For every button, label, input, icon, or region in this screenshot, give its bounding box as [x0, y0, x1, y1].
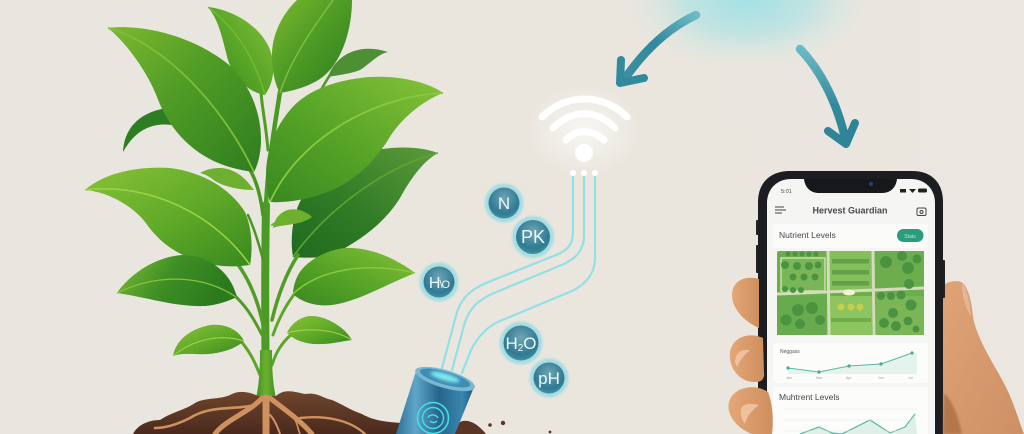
chart card: top: [773, 343, 928, 383]
chart card: bottom: Muhtrent Levels: [779, 392, 839, 402]
soil mound: [133, 391, 551, 434]
chart card: top: Jun: [878, 376, 884, 380]
leaf: big top left: [108, 27, 261, 172]
chart card: top: Mar: [816, 376, 823, 380]
sensor ring icon: [418, 402, 448, 434]
nutrient bubble: N: N: [498, 194, 510, 213]
nutrient bubble: pH: pH: [538, 369, 560, 388]
leaf: left middle: [117, 255, 237, 306]
data wires: [442, 173, 595, 373]
main stem base: [256, 350, 276, 398]
arrow: cloud to phone: [800, 49, 855, 144]
leaf: right middle: [293, 248, 415, 305]
nutrient bubble: N: [484, 184, 524, 222]
leaf: big right: [266, 77, 443, 202]
chart card: top: Neggass: [780, 349, 800, 355]
leaf: top centre left: [208, 7, 273, 95]
status bar: 5:01: [781, 189, 792, 195]
nutrient bubble: H2O: O: [523, 334, 537, 353]
cloud glow: [613, 0, 883, 74]
chart card: bottom: [773, 387, 928, 434]
side buttons: [756, 220, 945, 298]
nutrient bubble: pH: [530, 358, 568, 398]
thumbnail shading: [962, 283, 971, 316]
menu icon: [775, 207, 786, 213]
plant: [85, 0, 443, 398]
leaf: lower right: [287, 316, 352, 344]
leaf: centre small: [273, 209, 312, 228]
back leaf: dark curl: [123, 108, 172, 152]
back leaf: small top right: [320, 49, 388, 92]
soil sensor: [396, 362, 477, 434]
field map: [777, 251, 924, 335]
roots: [155, 398, 365, 434]
status pill: [897, 229, 924, 242]
leaf: lower left: [173, 325, 244, 356]
app title: Hervest Guardian: [812, 206, 888, 216]
leaf: top centre: [272, 0, 352, 93]
nutrient bubble: PK: PK: [521, 227, 545, 247]
wire nodes: [570, 170, 598, 176]
finger 2: [730, 335, 764, 382]
stems: [232, 92, 298, 392]
section heading: [773, 224, 928, 248]
finger 3: [728, 387, 773, 434]
status bar: [781, 188, 927, 195]
nutrient bubble: PK: [512, 216, 554, 258]
nutrient bubble: H10: [420, 262, 458, 302]
nutrient bubble: H2O: H: [505, 334, 518, 353]
back leaf: dark right: [292, 147, 438, 258]
chart card: top: Jan: [786, 376, 792, 380]
leaf: small middle back: [200, 168, 254, 190]
notch: [804, 179, 897, 193]
chart card: top: Jul: [908, 376, 913, 380]
status pill: Stats: [904, 234, 916, 240]
chart card: top: Apr: [846, 376, 852, 380]
soil crumbs: [488, 421, 551, 433]
leaf: big left: [85, 168, 252, 266]
hand behind phone: [935, 281, 1024, 434]
nutrient bubble: H10: H\O: [429, 275, 451, 292]
section heading: Nutrient Levels: [779, 230, 836, 240]
wifi icon: [526, 84, 642, 176]
nutrient bubble: H2O: 2: [518, 343, 524, 354]
wrist shadow: [943, 393, 962, 434]
nutrient bubble: H2O: [500, 322, 542, 364]
finger 1: [732, 278, 759, 328]
camera icon: [917, 208, 926, 216]
arrow: cloud to wifi: [620, 15, 696, 83]
leaf: dark sliver: [222, 194, 250, 230]
hand: fingers: [728, 278, 773, 434]
phone: [756, 171, 945, 434]
